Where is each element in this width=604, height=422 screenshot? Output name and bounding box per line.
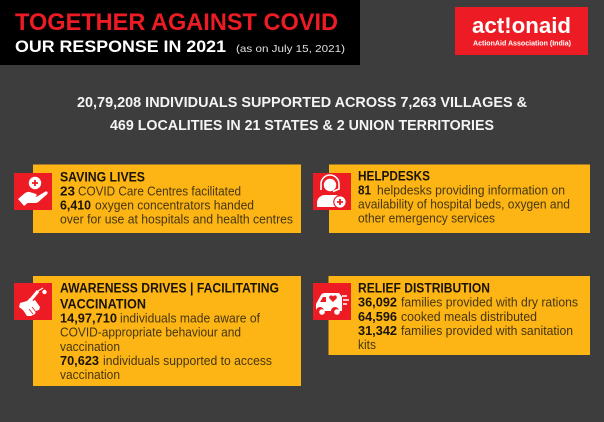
heading: relief distribution: RELIEF DISTRIBUTION [358,280,490,296]
icon: hand holding medical cross [14,173,52,210]
text: helpdesks details: availability of hospital beds, oxygen and [358,196,570,212]
text: saving lives details: COVID Care Centres facilitated [78,184,241,198]
text: relief details: families provided with dry rations [401,294,578,310]
date note: (as on July 15, 2021) [236,43,345,55]
heading: helpdesks: HELPDESKS [358,168,430,184]
panel: helpdesks [329,164,590,233]
text: awareness details: COVID-appropriate behaviour and [60,324,241,340]
heading: saving lives: SAVING LIVES [60,170,145,184]
text: awareness details: individuals made aware of [120,310,260,326]
text: awareness details: 14,97,710 [60,310,117,326]
summary statement [77,95,528,134]
summary statement: 20,79,208 INDIVIDUALS SUPPORTED ACROSS 7,263 VILLAGES & [77,95,528,111]
icon: ambulance with heart [313,283,351,320]
logo: ActionAid: ActionAid Association (India) [473,38,572,48]
text: saving lives details: 23 [60,184,75,198]
heading: awareness drives: AWARENESS DRIVES | FACILITATING [60,280,279,296]
text: relief details: kits [358,337,376,352]
logo: ActionAid: act!onaid [472,13,571,38]
text: helpdesks details: other emergency services [358,210,495,226]
text: relief details: cooked meals distributed [401,309,537,324]
text: helpdesks details [358,182,570,226]
text: relief details: families provided with sanitation [401,323,573,338]
heading: awareness drives: VACCINATION [60,296,146,312]
text: saving lives details: oxygen concentrators handed [95,198,254,212]
text: awareness details: vaccination [60,367,120,382]
text: awareness details: 70,623 [60,353,99,368]
header banner [0,0,360,65]
text: helpdesks details: helpdesks providing information on [377,182,565,198]
text: relief details: 31,342 [358,323,397,338]
panel: relief distribution [328,276,590,355]
text: relief details: 36,092 [358,294,397,310]
heading: awareness drives [60,280,279,312]
panel: awareness drives [33,276,301,386]
title: TOGETHER AGAINST COVID [15,9,338,36]
text: awareness details: vaccination [60,339,120,354]
icon: hand with syringe [14,283,52,320]
text: helpdesks details: 81 [358,182,371,198]
text: relief details: 64,596 [358,309,397,324]
panel: saving lives [33,164,301,233]
logo: ActionAid [455,7,588,55]
icon: headset agent [313,173,351,210]
text: saving lives details: 6,410 [60,198,91,212]
text: saving lives details: over for use at hospitals and health centres [60,212,293,226]
subtitle: OUR RESPONSE IN 2021 [15,38,226,56]
text: awareness details [60,310,272,382]
text: saving lives details [60,184,293,226]
text: relief details [358,294,578,352]
summary statement: 469 LOCALITIES IN 21 STATES & 2 UNION TERRITORIES [110,118,494,134]
text: awareness details: individuals supported to access [103,353,272,368]
